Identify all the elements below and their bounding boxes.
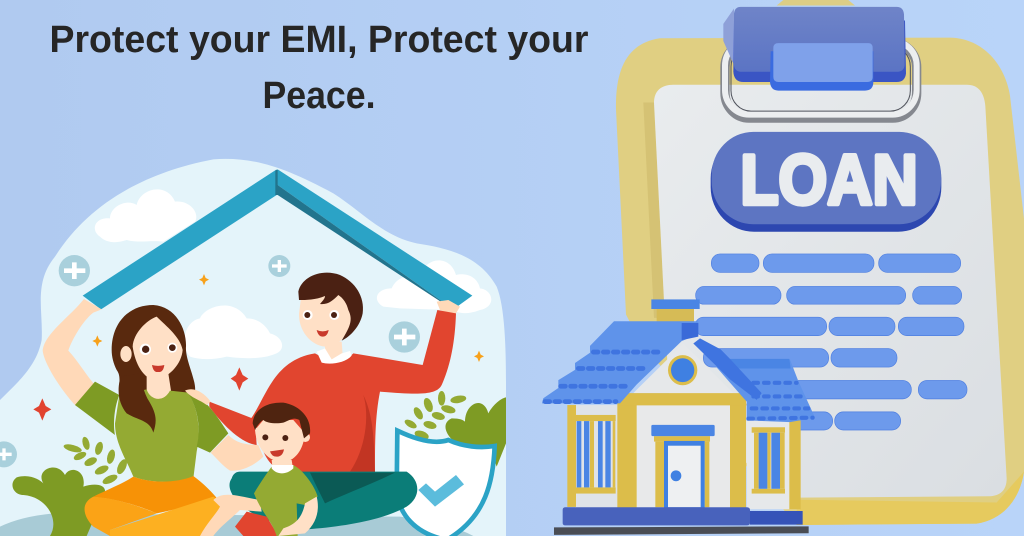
- background blob: [0, 159, 506, 536]
- paper: [654, 85, 1007, 498]
- chimney: [657, 308, 694, 325]
- clip: [723, 9, 734, 65]
- skirt: [93, 476, 218, 513]
- sparkles: [33, 367, 248, 421]
- round window: [668, 355, 697, 385]
- clipboard back: [777, 0, 855, 5]
- house: [542, 299, 815, 535]
- leaves left: [12, 436, 129, 536]
- family illustration: [0, 159, 506, 536]
- roof ridge: [693, 338, 762, 400]
- roof: [83, 169, 472, 309]
- man legs: [230, 472, 417, 529]
- left roof: [542, 321, 698, 403]
- ground: [0, 513, 473, 536]
- clouds: [95, 189, 491, 359]
- shield: [397, 431, 495, 536]
- clipboard shadow edge: [643, 103, 664, 318]
- boy: [235, 403, 318, 536]
- title: Protect your EMI, Protect your: [50, 19, 589, 61]
- plus badges: [0, 255, 420, 467]
- base shadow: [554, 526, 809, 535]
- title: [50, 19, 589, 117]
- metal ring: [725, 41, 917, 118]
- text lines: [695, 254, 967, 430]
- windows: [577, 421, 780, 489]
- right roof: [717, 360, 815, 422]
- loan badge: [711, 132, 941, 232]
- title: Peace.: [262, 75, 376, 117]
- door: [664, 441, 705, 508]
- walls: [575, 405, 618, 508]
- base: [750, 511, 803, 525]
- leaves right: [403, 391, 506, 467]
- loan badge: LOAN: [740, 140, 918, 219]
- posts: [567, 393, 801, 509]
- clipboard lower edge: [797, 472, 1024, 525]
- clipboard and house: [542, 0, 1024, 535]
- woman: [43, 299, 263, 536]
- man: [209, 273, 460, 473]
